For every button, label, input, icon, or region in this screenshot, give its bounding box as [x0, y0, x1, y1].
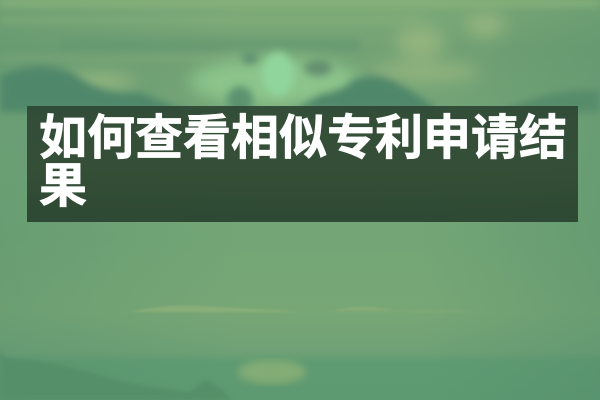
title: 如何查看相似专利申请结 — [39, 112, 567, 165]
title: 果 — [39, 160, 87, 213]
title band — [27, 106, 578, 222]
title — [39, 112, 567, 213]
